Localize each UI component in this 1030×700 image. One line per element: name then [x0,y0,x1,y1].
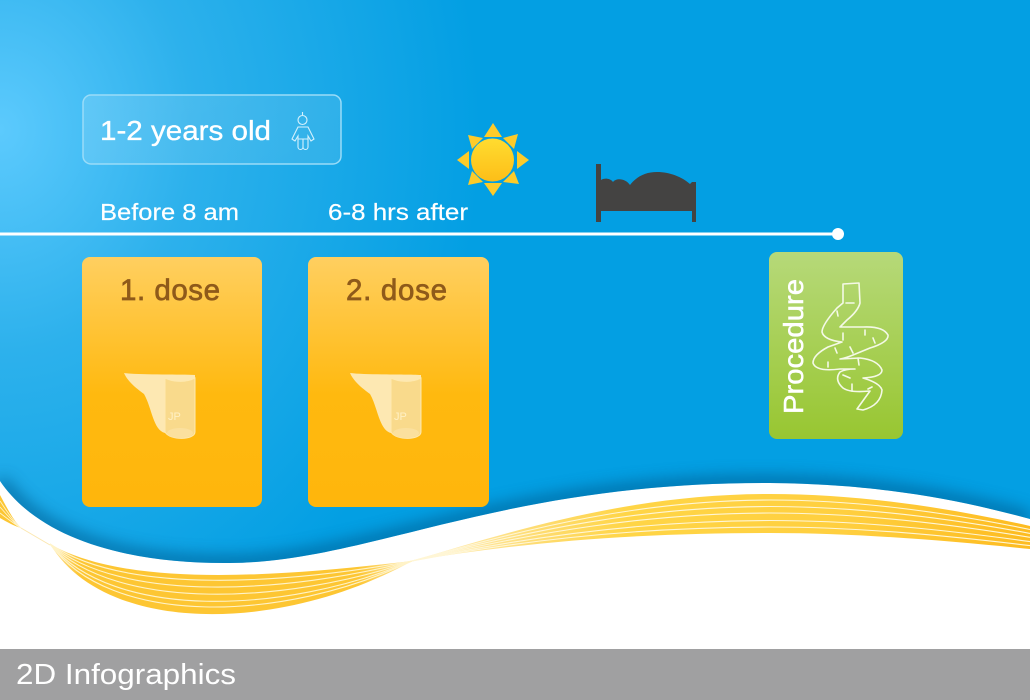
timeline labels [100,199,468,225]
label: 6-8 hrs after: 6-8 hrs after [328,199,468,225]
age badge [83,95,341,164]
icon: cup: JP [394,411,407,423]
icon: cup [350,373,421,438]
dose card 1 [82,257,262,507]
icon: cup: JP [168,411,181,423]
footer bar [0,649,1030,700]
icon: intestine [813,283,888,410]
timeline line [0,228,844,240]
icon: toddler [292,112,314,150]
icon: bed [596,164,696,222]
label: procedure: Procedure [778,279,809,414]
yellow wave ribbon [0,494,1030,614]
heading: 2. dose: 2. dose [346,274,447,307]
icon: cup [124,373,195,438]
procedure card [769,252,903,439]
age label: 1-2 years old [100,115,271,146]
footer title: 2D Infographics [16,659,236,691]
label: before 8 am: Before 8 am [100,199,239,225]
dose card 2 [308,257,489,507]
icon: sun [457,123,529,196]
heading: 1. dose: 1. dose [120,274,220,307]
